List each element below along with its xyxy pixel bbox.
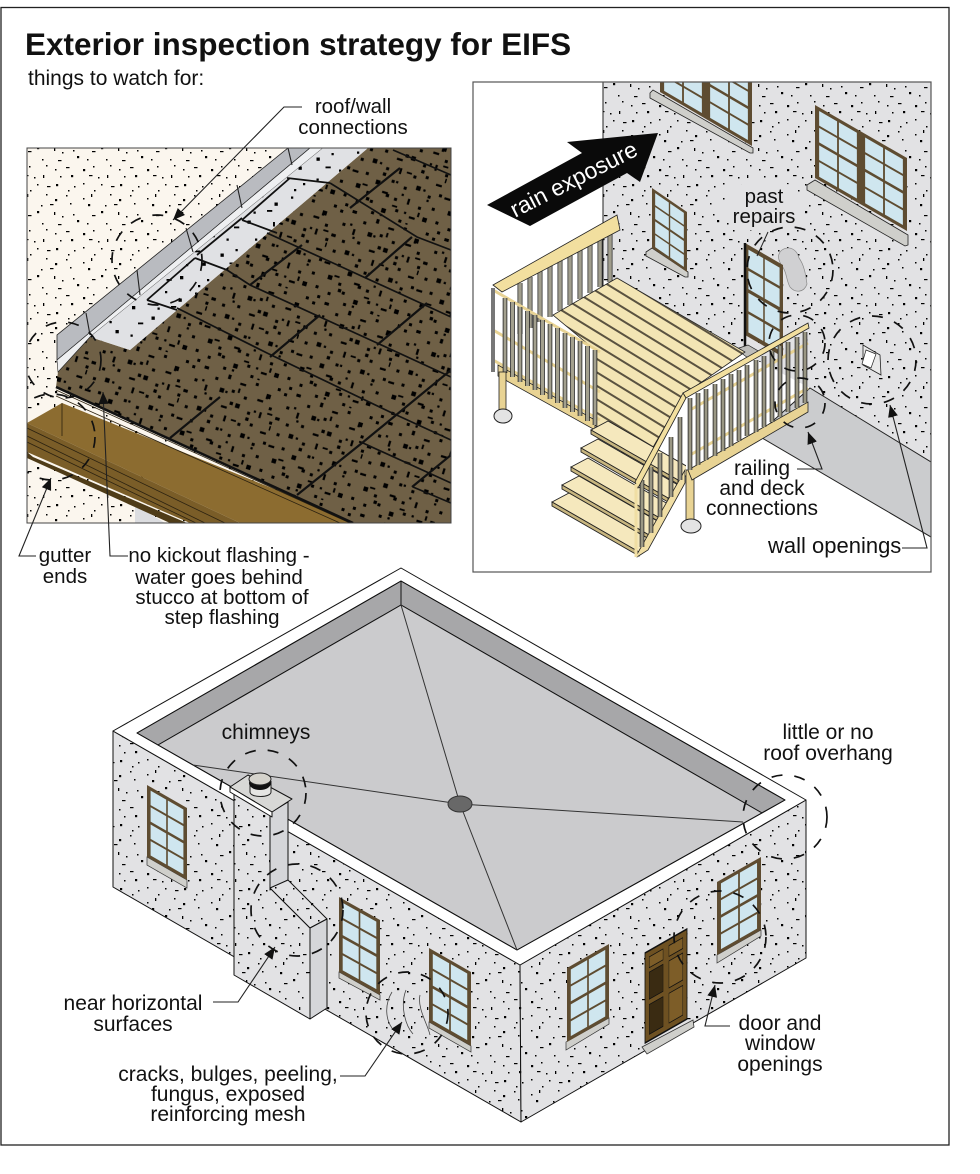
dashed circle: railing top connection	[769, 315, 825, 371]
chimney flue	[249, 773, 271, 796]
left wall window	[147, 785, 187, 888]
leader: wall openings	[890, 405, 927, 548]
dashed circle: little or no roof overhang	[743, 775, 827, 859]
label: no kickout flashing: water goes behind	[134, 566, 303, 589]
label: gutter ends: ends	[43, 565, 87, 588]
dashed circle: near horizontal surfaces	[251, 864, 343, 956]
label: railing and deck connections: and deck	[719, 477, 805, 500]
label: past repairs: repairs	[733, 205, 795, 228]
dashed circle: past repairs	[747, 227, 833, 313]
label: chimneys: chimneys	[222, 721, 310, 744]
label: near horizontal surfaces: near horizontal	[64, 992, 202, 1015]
label: roof/wall connections: roof/wall	[315, 95, 391, 118]
right wall window, right	[717, 857, 761, 963]
stair stringer and railing	[635, 393, 686, 557]
leader: roof/wall connections	[173, 107, 302, 220]
shingle joints	[170, 168, 451, 495]
right railing	[683, 323, 809, 480]
roof inner rim, left	[137, 581, 401, 745]
label: little or no roof overhang: roof overhang	[763, 742, 893, 765]
roof slope lines	[193, 605, 743, 950]
leader: past repairs	[757, 232, 768, 256]
chimney lower side	[310, 919, 327, 1019]
crack marks	[387, 990, 430, 1035]
dashed circle: gutter ends	[28, 393, 96, 481]
right post and footing	[681, 470, 701, 533]
label: no kickout flashing: stucco at bottom of	[135, 586, 309, 609]
subtitle: things to watch for:	[28, 67, 204, 90]
front door	[645, 929, 687, 1043]
dashed circle: kickout flashing	[25, 322, 101, 398]
glass door	[736, 243, 783, 358]
leader: no kickout flashing	[103, 392, 128, 556]
step flashing, white edge	[57, 148, 323, 372]
roof inner edge	[137, 581, 785, 950]
step flashing, speckled shingle cover	[90, 148, 368, 350]
gutter	[27, 390, 358, 523]
roof edge	[56, 387, 353, 523]
front left window	[429, 948, 471, 1052]
label: door and window openings: openings	[737, 1053, 823, 1076]
label: door and window openings: door and	[739, 1012, 821, 1035]
right wall window, left	[566, 944, 609, 1050]
dashed circle: chimneys	[220, 750, 306, 836]
label: no kickout flashing: step flashing	[164, 606, 280, 629]
roof inner rim, right	[401, 581, 785, 813]
chimney upper side	[270, 802, 288, 890]
back railing balusters	[520, 231, 610, 334]
roof deck	[158, 605, 762, 950]
label: gutter ends: gutter	[39, 544, 91, 567]
stucco wall background	[28, 148, 342, 522]
dashed circle: door and window openings	[674, 891, 766, 983]
label: railing and deck connections: railing	[734, 457, 790, 480]
step flashing edges	[147, 178, 330, 310]
shingle course lines	[177, 150, 451, 503]
door sill	[642, 1020, 694, 1054]
label backing: past repairs	[728, 184, 800, 230]
label: past repairs: past	[745, 185, 784, 208]
label: little or no roof overhang: little or no	[782, 721, 874, 744]
title: Exterior inspection strategy for EIFS	[25, 26, 571, 62]
leader: railing	[797, 432, 822, 469]
label: roof/wall connections: connections	[298, 116, 408, 139]
leader: near horizontal surfaces	[213, 947, 275, 1002]
dashed circle: railing and deck connections	[775, 378, 825, 428]
building	[113, 568, 827, 1122]
chimney shoulder	[270, 880, 327, 928]
label: no kickout flashing: no kickout flashing -	[128, 544, 310, 567]
leader: gutter ends	[19, 478, 51, 556]
label: cracks, bulges, peeling, fungus, exposed reinforcing mesh: cracks, bulges, peeling,	[118, 1063, 338, 1086]
chimney cap	[230, 775, 292, 812]
step flashing, vertical face	[57, 148, 310, 360]
middle left window	[339, 897, 380, 1000]
panel: deck and wall	[487, 82, 930, 558]
label: near horizontal surfaces: surfaces	[93, 1013, 173, 1036]
wall strip under gutter	[135, 507, 164, 522]
ground	[757, 388, 931, 537]
leader: door and window openings	[705, 985, 730, 1026]
dashed circle: roof/wall connections	[112, 215, 202, 305]
rain exposure arrow: rain exposure	[506, 136, 642, 222]
dashed circle: cracks	[366, 972, 448, 1054]
panel: roof and wall detail	[9, 148, 451, 523]
label: railing and deck connections: connections	[706, 497, 818, 520]
wall vent	[862, 345, 881, 375]
label: wall openings: wall openings	[767, 533, 901, 558]
label: cracks, bulges, peeling, fungus, exposed reinforcing mesh: reinforcing mesh	[150, 1103, 306, 1126]
upper window with sill	[650, 82, 754, 154]
label: door and window openings: window	[744, 1032, 816, 1055]
roof drain	[448, 796, 472, 812]
panel border: roof detail	[27, 148, 451, 523]
dashed circle: wall openings	[828, 316, 916, 404]
deck floor	[553, 278, 745, 470]
flashing divisions	[86, 148, 292, 335]
past repair patch	[779, 248, 807, 291]
back railing cap	[493, 215, 620, 292]
left wall	[113, 731, 521, 1122]
right wall	[520, 800, 806, 1122]
left front railing	[493, 288, 600, 430]
panel border: deck	[473, 82, 931, 572]
left post and footing	[494, 372, 512, 423]
double window with sill	[807, 105, 908, 246]
small window with sill	[646, 188, 688, 277]
chimney front face	[234, 790, 310, 1019]
parapet top	[113, 568, 806, 965]
leader: cracks	[340, 1022, 402, 1076]
shingle roof	[56, 148, 451, 523]
stair treads	[552, 421, 695, 556]
wall	[603, 82, 931, 462]
label: cracks, bulges, peeling, fungus, exposed reinforcing mesh: fungus, exposed	[151, 1083, 305, 1106]
